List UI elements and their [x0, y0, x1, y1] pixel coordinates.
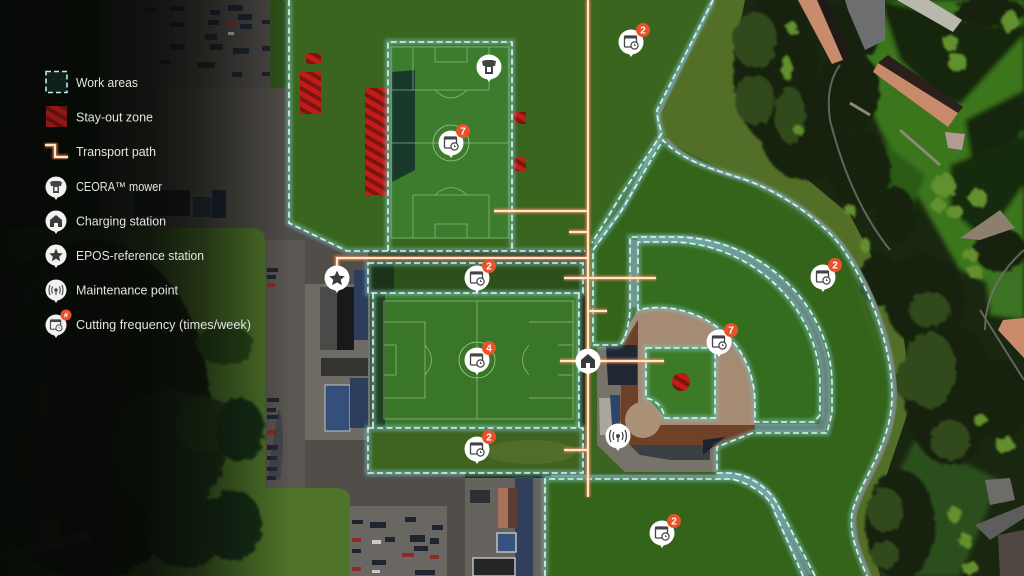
marker: cutting frequency 7 north pitch — [438, 124, 470, 158]
stay-out zone: small east 2 — [514, 158, 526, 171]
west car park — [265, 240, 317, 488]
legend label: charging station: Charging station — [76, 214, 166, 228]
marker: cutting frequency 7 north pitch: 7 — [460, 126, 466, 138]
stay-out zone: long block — [365, 88, 387, 195]
marker: cutting frequency 2 south field: 2 — [671, 516, 677, 528]
marker: maintenance point — [606, 424, 630, 451]
legend label: transport path: Transport path — [76, 145, 156, 159]
legend — [45, 72, 251, 338]
stay-out zones — [300, 53, 690, 391]
legend icon: transport path — [45, 145, 68, 157]
south buildings — [465, 477, 545, 576]
marker: CEORA mower — [476, 54, 502, 82]
stay-out zone: small north — [306, 53, 321, 64]
stay-out zone: west block — [300, 72, 321, 114]
legend icon: EPOS-reference station — [46, 244, 66, 268]
legend label: stay-out zone: Stay-out zone — [76, 110, 153, 124]
asphalt — [100, 0, 545, 576]
legend icon: cutting frequency — [46, 310, 72, 338]
stay-out zone: small east 1 — [514, 112, 526, 124]
legend label: cutting frequency: Cutting frequency (times/week) — [76, 318, 251, 332]
marker: cutting frequency 7 baseball: 7 — [728, 326, 734, 336]
legend label: work areas: Work areas — [76, 76, 138, 90]
legend icon: work areas — [46, 72, 67, 92]
lawns on the right — [850, 0, 1024, 576]
marker: EPOS-reference station — [324, 266, 350, 293]
marker: cutting frequency 4 south pitch: 4 — [486, 344, 492, 354]
trees — [733, 0, 1024, 576]
legend icon: cutting frequency: # — [64, 312, 68, 320]
marker: cutting frequency 2 outfield — [810, 258, 842, 292]
legend label: CEORA mower: CEORA™ mower — [76, 180, 162, 194]
left dark lawn — [0, 228, 350, 576]
north football pitch — [391, 46, 509, 239]
left darkening gradient — [0, 0, 300, 576]
legend label: maintenance point: Maintenance point — [76, 284, 179, 298]
rough grass strips — [369, 264, 582, 473]
stay-out zone: baseball mound — [672, 373, 690, 391]
south football pitch — [373, 293, 579, 428]
main grass — [268, 0, 892, 576]
marker: cutting frequency 7 baseball — [706, 323, 738, 357]
baseball stadium — [597, 308, 755, 472]
marker: cutting frequency 2 south field — [650, 514, 681, 548]
south car park — [350, 506, 447, 576]
faint dark-zone trees and houses — [0, 240, 264, 576]
marker: cutting frequency 2 south strip: 2 — [486, 432, 492, 444]
buildings north-east — [798, 0, 1024, 576]
building left of asphalt — [135, 190, 226, 218]
grass strip by car park — [268, 0, 287, 88]
work area outlines — [289, 0, 895, 576]
marker: cutting frequency 4 south pitch — [464, 341, 496, 375]
legend icon: maintenance point — [46, 280, 66, 303]
marker: cutting frequency 2 top: 2 — [640, 26, 646, 36]
yellow-green verge beside loop path — [657, 0, 912, 576]
marker: cutting frequency 2 south strip — [464, 430, 496, 464]
legend icon: CEORA mower — [46, 176, 66, 200]
marker: charging station — [576, 348, 600, 376]
legend label: EPOS-reference station: EPOS-reference station — [76, 249, 204, 263]
marker: cutting frequency 2 top — [618, 23, 650, 57]
legend icon: stay-out zone — [46, 106, 67, 127]
marker: cutting frequency 2 outfield: 2 — [832, 260, 838, 272]
transport paths — [337, 0, 664, 497]
marker: cutting frequency 2 north strip — [464, 259, 496, 293]
west buildings — [305, 270, 370, 440]
legend icon: charging station — [46, 210, 66, 234]
top car park — [142, 0, 270, 88]
marker: cutting frequency 2 north strip: 2 — [486, 262, 492, 272]
